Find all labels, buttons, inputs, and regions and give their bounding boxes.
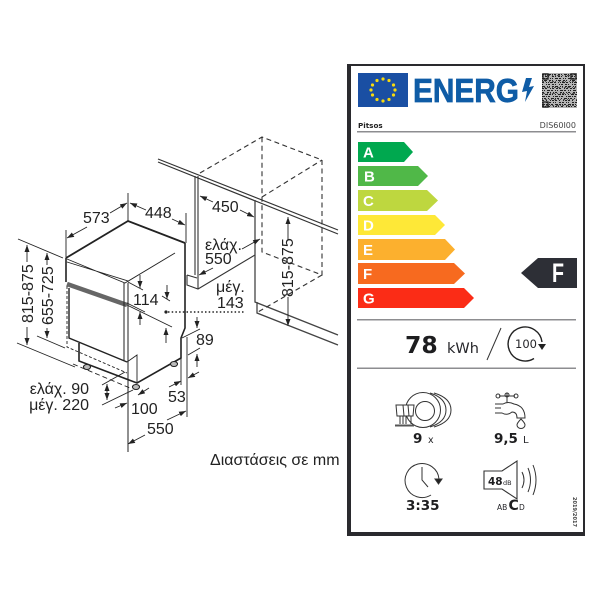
dimension labels: 53 <box>168 389 186 406</box>
class E <box>358 239 455 260</box>
class B <box>358 166 428 186</box>
dimension labels: 100 <box>131 401 158 418</box>
icon: speaker noise: dB <box>503 479 512 487</box>
water consumption value: 9,5 <box>494 431 518 447</box>
programme duration value: 3:35 <box>406 498 440 514</box>
energy scale arrows <box>358 142 474 308</box>
dimension labels: μέγ. 220 <box>29 397 89 414</box>
energy consumption value: 78 <box>405 331 438 359</box>
dimension labels: 573 <box>83 210 110 227</box>
dishwasher appliance drawing <box>66 221 185 452</box>
noise class scale: AB <box>497 503 507 512</box>
dimension labels: 550 <box>147 421 174 438</box>
dimension labels: 550 <box>205 251 232 268</box>
dimension labels: 815-875 <box>20 264 37 323</box>
dimension labels <box>20 199 297 438</box>
icon: lightning bolt <box>522 78 534 102</box>
class A <box>358 142 413 162</box>
noise class scale <box>497 498 525 514</box>
dimension labels: 655-725 <box>40 266 57 325</box>
heading: ENERG: ENERG <box>413 73 519 110</box>
water consumption value: L <box>523 435 529 446</box>
icon: appliance feet <box>84 362 178 390</box>
class G <box>358 288 474 308</box>
rating arrow F <box>521 258 577 288</box>
dimension labels: ελάχ. 90 <box>30 381 89 398</box>
cabinet niche drawing <box>158 137 338 345</box>
QR code <box>542 73 577 108</box>
energy unit: kWh <box>447 341 479 357</box>
icon: speaker noise <box>484 461 536 499</box>
icon: clock <box>405 464 442 498</box>
dimension labels: 114 <box>133 292 159 309</box>
class G: G <box>363 290 375 308</box>
caption: dimensions in mm: Διαστάσεις σε mm <box>210 452 340 469</box>
icon: speaker noise: 48 <box>488 476 503 488</box>
icon: 100 cycles <box>508 327 546 361</box>
class D: D <box>363 218 374 234</box>
supplier name: Pitsos <box>358 121 383 130</box>
dimension labels: μέγ. <box>216 279 245 296</box>
regulation number: 2019/2017 <box>571 497 577 527</box>
icon: plates and glasses <box>395 392 451 428</box>
icon: water tap <box>495 393 525 428</box>
water consumption value <box>494 431 529 447</box>
noise class scale: D <box>519 503 525 512</box>
class D <box>358 215 445 235</box>
place settings value: 9 <box>413 431 422 447</box>
dimension lines and arrows <box>17 193 288 444</box>
place settings value: x <box>428 435 434 446</box>
class C: C <box>363 193 374 210</box>
dimension labels: 448 <box>145 205 172 222</box>
class E: E <box>363 242 373 259</box>
class F <box>358 263 465 284</box>
dimension labels: 815-875 <box>280 238 297 297</box>
class B: B <box>364 168 375 186</box>
icon: 100 cycles: 100 <box>515 337 537 351</box>
dimension labels: 143 <box>217 295 244 312</box>
icon: EU flag <box>358 73 408 107</box>
dimension labels: 450 <box>212 199 239 216</box>
class C <box>358 190 438 211</box>
rating arrow F: F <box>552 258 564 288</box>
class A: A <box>363 144 374 162</box>
dimension labels: 89 <box>196 332 214 349</box>
panel: energy label <box>347 64 585 536</box>
class F: F <box>363 266 372 283</box>
place settings value <box>413 431 434 447</box>
model identifier: DIS60I00 <box>540 121 576 130</box>
noise class scale: C <box>508 498 519 514</box>
dimension labels: ελάχ. <box>205 237 242 254</box>
